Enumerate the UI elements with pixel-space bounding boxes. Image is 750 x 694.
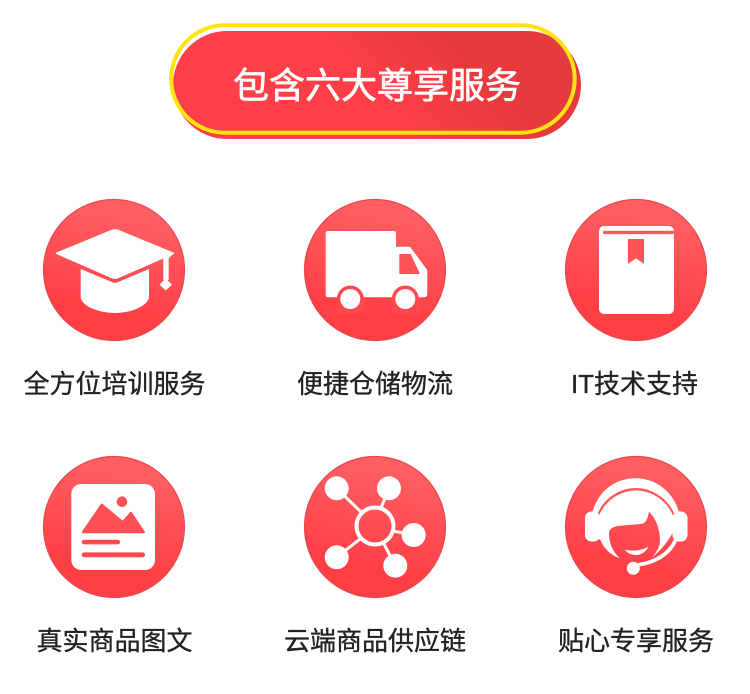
title: 包含六大尊享服务 [233, 65, 521, 106]
service: training [23, 200, 206, 399]
service: dedicated support [558, 456, 714, 656]
label: 全方位培训服务 [23, 369, 206, 399]
label: IT技术支持 [571, 369, 698, 399]
title banner [171, 25, 581, 139]
label: 便捷仓储物流 [297, 369, 453, 399]
icon: headset agent [566, 456, 706, 598]
icon: network nodes [304, 456, 446, 598]
label: 贴心专享服务 [558, 626, 714, 656]
service: IT support [566, 200, 706, 399]
icon: graduation cap [44, 200, 184, 340]
service: logistics [297, 200, 453, 399]
service: product images [36, 456, 193, 656]
banner red pill [173, 31, 581, 139]
label: 真实商品图文 [36, 626, 193, 656]
label: 云端商品供应链 [284, 626, 466, 656]
banner yellow outline [171, 25, 575, 133]
icon: book [566, 200, 706, 340]
service: cloud supply chain [284, 456, 466, 656]
icon: truck [304, 200, 446, 340]
icon: picture card [44, 456, 184, 598]
